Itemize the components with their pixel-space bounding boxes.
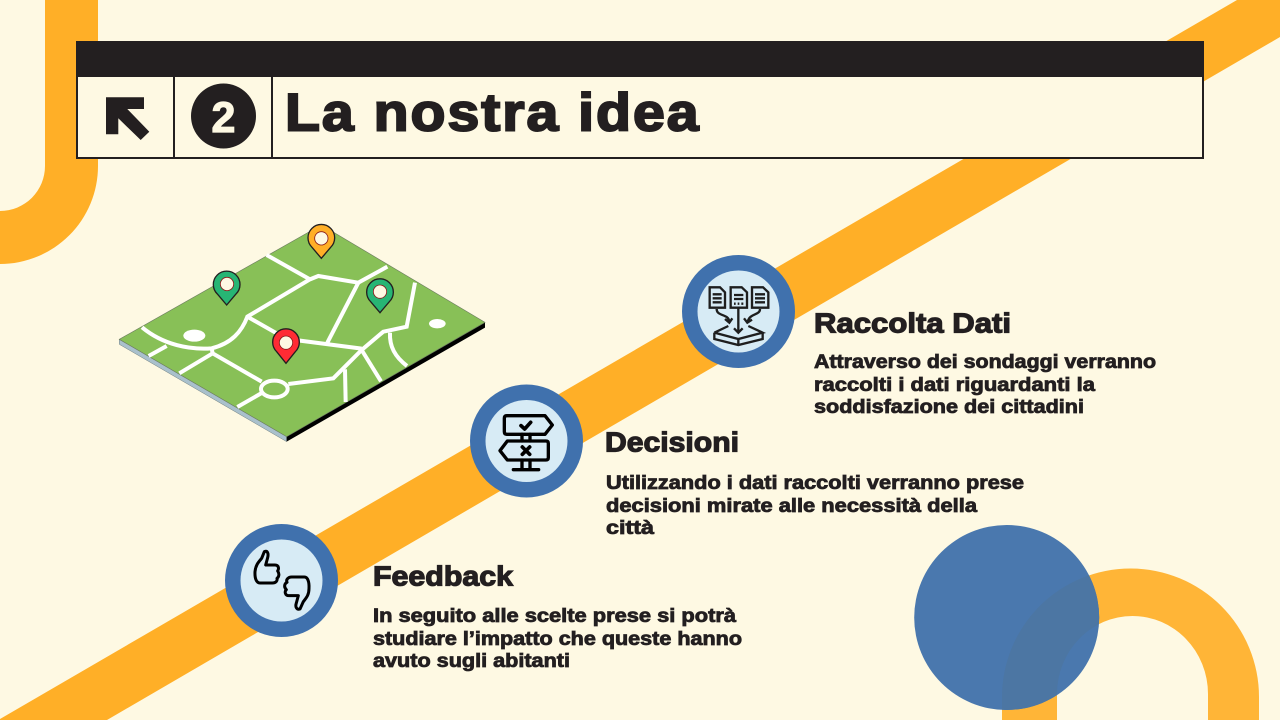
- icon: thumbs up and down: [225, 524, 338, 637]
- text block: decisioni mirate alle necessità della: [606, 496, 977, 517]
- title: La nostra idea: [285, 82, 700, 142]
- text block: avuto sugli abitanti: [373, 651, 570, 672]
- isometric city map: [119, 224, 485, 442]
- header bar: [76, 41, 1204, 158]
- text block: soddisfazione dei cittadini: [814, 397, 1084, 418]
- heading: Feedback: [373, 560, 513, 592]
- step: Decisioni: [470, 384, 1024, 539]
- text block: [606, 473, 1024, 539]
- step: Feedback: [225, 524, 742, 672]
- step: Raccolta Dati: [682, 255, 1156, 418]
- text block: In seguito alle scelte prese si potrà: [373, 606, 736, 627]
- map roads: [142, 255, 415, 407]
- text block: Attraverso dei sondaggi verranno: [814, 352, 1156, 373]
- text block: [373, 606, 742, 672]
- top left orange curve: [0, 0, 98, 264]
- pin: green right: [367, 279, 393, 313]
- icon: documents into box: [682, 255, 795, 368]
- pin: red: [273, 329, 299, 363]
- heading: Decisioni: [605, 427, 739, 458]
- heading: Raccolta Dati: [814, 308, 1011, 338]
- text block: città: [606, 518, 655, 539]
- icon: signpost: [470, 384, 583, 498]
- pin: green left: [213, 271, 240, 305]
- text block: [814, 352, 1156, 418]
- map ground: [119, 225, 485, 437]
- bottom right orange arch: [1002, 568, 1259, 720]
- pin: orange: [308, 224, 335, 258]
- text block: studiare l’impatto che queste hanno: [373, 629, 742, 650]
- map side edges: [119, 339, 287, 442]
- text block: Utilizzando i dati raccolti verranno prese: [606, 473, 1024, 494]
- icon: north-west arrow: [106, 97, 149, 140]
- map ponds: [183, 330, 205, 342]
- text block: raccolti i dati riguardanti la: [814, 375, 1095, 396]
- blue decorative circle: [914, 525, 1100, 710]
- number badge: 2: [212, 94, 235, 142]
- number badge: [191, 84, 256, 148]
